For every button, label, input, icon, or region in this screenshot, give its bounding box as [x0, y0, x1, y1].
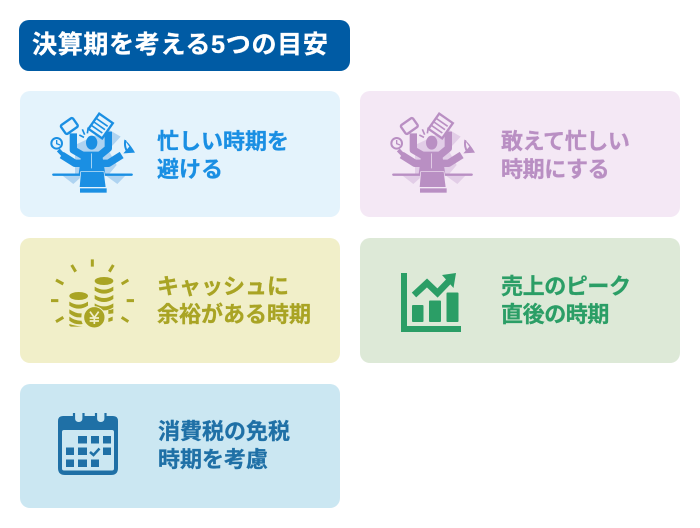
icon: coins: [51, 259, 134, 328]
text: deliberately busy: [501, 129, 630, 182]
icon: calendar: [58, 413, 118, 475]
text: cash surplus: [157, 274, 311, 327]
text: deliberately busy: 敢えて忙しい: [501, 129, 630, 154]
panel: deliberately busy: [360, 91, 680, 217]
icon: busy person purple: [390, 112, 475, 193]
text: after sales peak: [501, 274, 631, 327]
text: after sales peak: 直後の時期: [501, 302, 609, 327]
title: [19, 20, 350, 71]
text: after sales peak: 売上のピーク: [501, 274, 631, 299]
text: avoid busy period: [157, 129, 289, 182]
title: 決算期を考える5つの目安: [32, 31, 329, 59]
panel: avoid busy period: [20, 91, 340, 217]
text: consumption tax: 時期を考慮: [158, 447, 268, 472]
text: avoid busy period: 忙しい時期を: [157, 129, 289, 154]
panel: after sales peak: [360, 238, 680, 363]
panel: cash surplus: [20, 238, 340, 363]
icon: growth chart: [401, 273, 461, 332]
icon: busy person blue: [50, 112, 135, 193]
text: consumption tax: [158, 419, 290, 472]
text: avoid busy period: 避ける: [157, 157, 223, 182]
text: cash surplus: 余裕がある時期: [157, 302, 311, 327]
text: cash surplus: キャッシュに: [157, 274, 289, 299]
panel: consumption tax: [20, 384, 340, 508]
text: consumption tax: 消費税の免税: [158, 419, 290, 444]
text: deliberately busy: 時期にする: [501, 157, 609, 182]
